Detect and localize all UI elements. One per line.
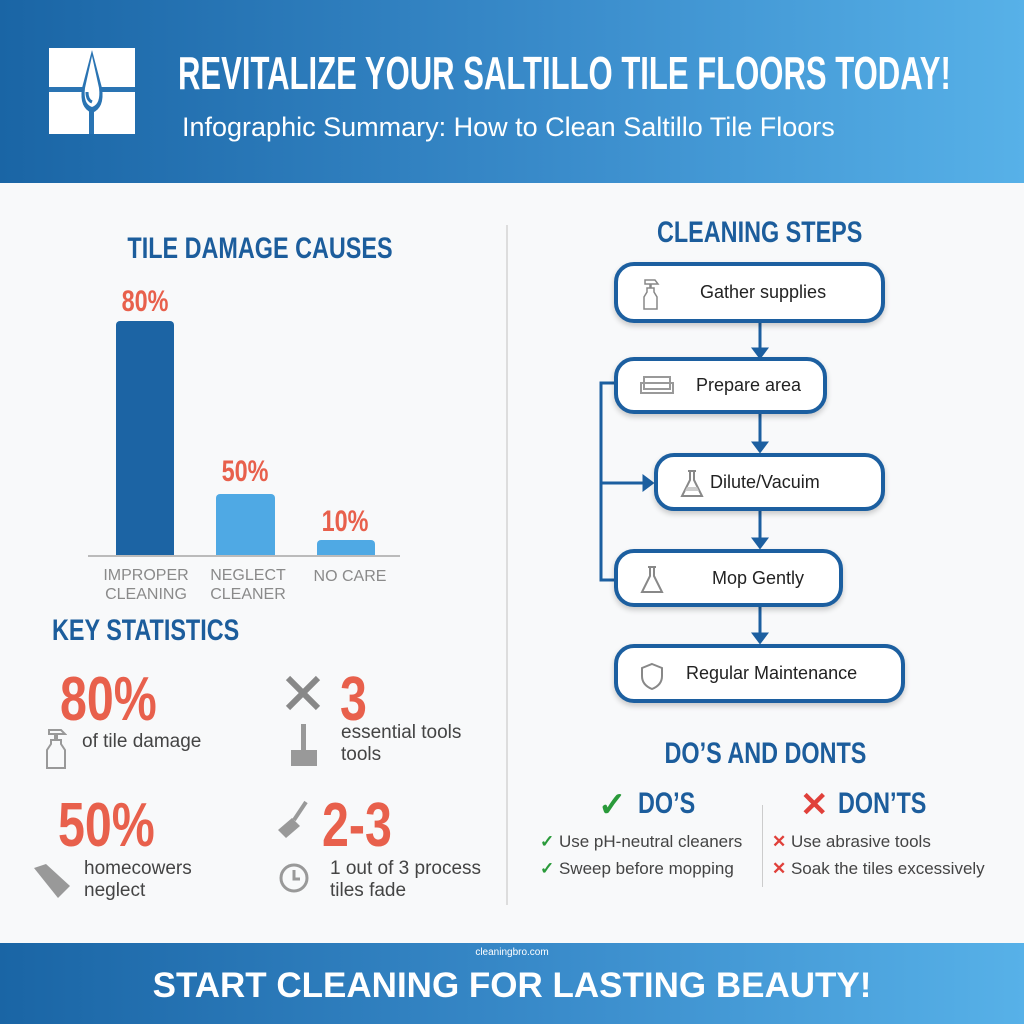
heading: key statistics: KEY STATISTICS xyxy=(52,614,239,647)
bar labels: IMPROPER xyxy=(103,567,189,584)
bar chart: 10% xyxy=(322,505,368,538)
footer source: cleaningbro.com xyxy=(475,947,549,958)
dos column: ✓ xyxy=(598,786,626,824)
step 1 xyxy=(614,262,885,323)
stat 2-3: 2-3 xyxy=(322,791,392,860)
stat 50%: neglect xyxy=(84,880,145,901)
bar chart: NEGLECT xyxy=(210,567,286,584)
bar labels xyxy=(103,567,189,603)
stat 2-3 xyxy=(278,791,481,901)
step 2: Prepare area xyxy=(696,375,801,395)
donts column xyxy=(772,786,985,878)
step 3 xyxy=(654,453,885,511)
stat 3 tools xyxy=(286,665,461,766)
stat 80%: of tile damage xyxy=(82,731,201,752)
dos column xyxy=(540,786,742,878)
donts column: ✕ Use abrasive tools xyxy=(772,832,931,851)
donts column: ✕ Soak the tiles excessively xyxy=(772,859,985,878)
dos column: ✓ Sweep before mopping xyxy=(540,859,734,878)
dos column: ✓ Use pH-neutral cleaners xyxy=(540,832,742,851)
stat 80%: 80% xyxy=(60,665,157,734)
bar chart: 50% xyxy=(222,455,268,488)
bar chart: CLEANER xyxy=(210,586,286,603)
stat 3 tools: tools xyxy=(341,744,381,765)
subtitle: Infographic Summary: How to Clean Saltillo Tile Floors xyxy=(182,112,835,142)
stat 2-3: tiles fade xyxy=(330,880,406,901)
footer call to action: START CLEANING FOR LASTING BEAUTY! xyxy=(153,966,871,1005)
bar 10% xyxy=(317,540,375,555)
icon: tile with water drop xyxy=(49,48,135,134)
bar 80% xyxy=(116,321,174,555)
bar chart: NO CARE xyxy=(314,568,386,585)
heading: cleaning steps: CLEANING STEPS xyxy=(657,216,863,249)
header banner xyxy=(0,0,1024,183)
step 5: Regular Maintenance xyxy=(686,663,857,683)
stat 50%: homecowers xyxy=(84,858,192,879)
stat 3 tools: 3 xyxy=(340,665,367,734)
bar 50% xyxy=(216,494,275,555)
step 4: Mop Gently xyxy=(712,568,804,588)
step 1: Gather supplies xyxy=(700,282,826,302)
donts column: DON’TS xyxy=(838,787,926,820)
stat 50%: 50% xyxy=(58,791,155,860)
heading: tile damage causes: TILE DAMAGE CAUSES xyxy=(127,232,393,265)
dos/donts divider xyxy=(762,805,763,887)
step 2 xyxy=(614,357,827,414)
bar chart: 80% xyxy=(122,285,168,318)
stat 50% xyxy=(34,791,192,901)
divider xyxy=(506,225,508,905)
step 4 xyxy=(614,549,843,607)
bar chart xyxy=(88,285,400,603)
title: REVITALIZE YOUR SALTILLO TILE FLOORS TODAY! xyxy=(178,47,951,99)
footer banner xyxy=(0,943,1024,1024)
donts column: ✕ xyxy=(800,786,828,824)
stat 80% xyxy=(46,665,201,769)
bar labels: CLEANING xyxy=(105,586,187,603)
dos column: DO’S xyxy=(638,787,695,820)
heading: do's and donts: DO’S AND DONTS xyxy=(664,737,866,770)
stat 3 tools: essential tools xyxy=(341,722,461,743)
flowchart xyxy=(600,323,769,644)
stat 2-3: 1 out of 3 process xyxy=(330,858,481,879)
step 5 xyxy=(614,644,905,703)
step 3: Dilute/Vacuim xyxy=(710,472,820,492)
